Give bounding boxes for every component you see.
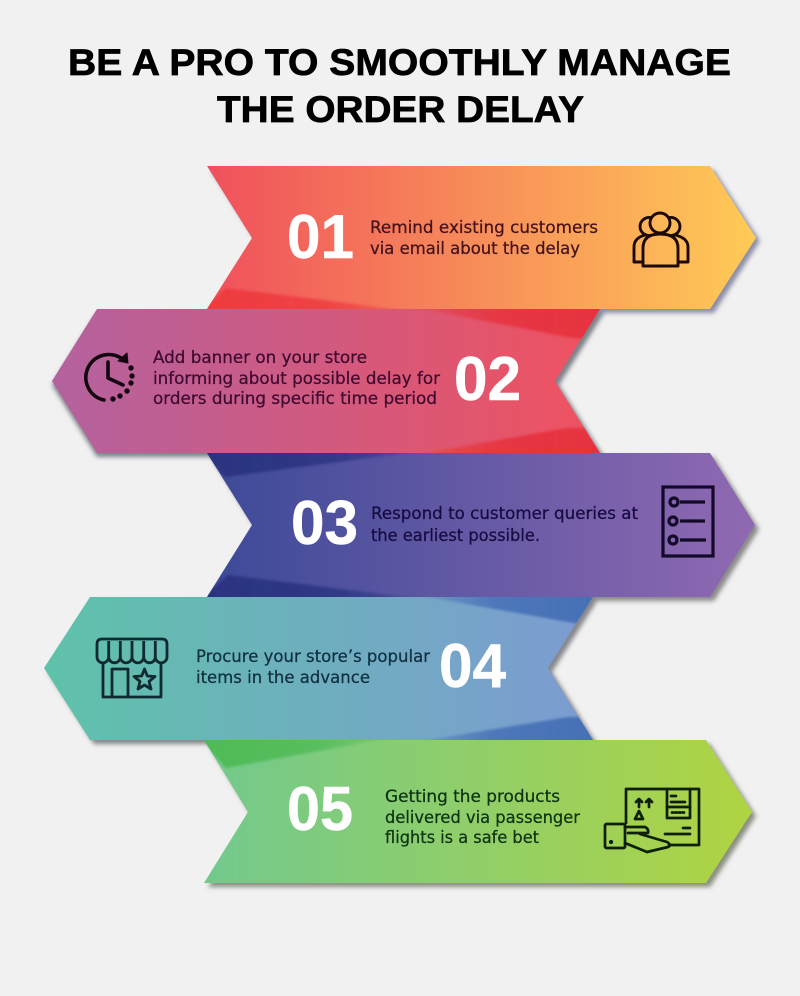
step 05 text: flights is a safe bet bbox=[385, 828, 540, 847]
panel: step 03 bbox=[200, 450, 755, 600]
panel: step 01 bbox=[200, 166, 756, 312]
step 02 number: 02 bbox=[454, 345, 521, 414]
icon: customers bbox=[634, 213, 688, 266]
step 01 text: Remind existing customers bbox=[370, 218, 598, 237]
step 04 number: 04 bbox=[439, 632, 506, 701]
step 03 number: 03 bbox=[291, 489, 358, 558]
icon: clock bbox=[86, 353, 135, 402]
panel: step 04 bbox=[44, 594, 598, 743]
icon: checklist bbox=[663, 487, 713, 556]
step 02 text: orders during specific time period bbox=[153, 389, 437, 408]
panel: step 05 bbox=[198, 737, 752, 883]
title bbox=[68, 42, 731, 130]
title: BE A PRO TO SMOOTHLY MANAGE bbox=[68, 42, 731, 83]
step 02 text: Add banner on your store bbox=[153, 348, 367, 367]
title: THE ORDER DELAY bbox=[217, 89, 584, 130]
step 01 number: 01 bbox=[287, 203, 354, 272]
step 04 text: items in the advance bbox=[196, 668, 370, 687]
icon: store bbox=[97, 639, 167, 697]
step 03 text: the earliest possible. bbox=[371, 526, 540, 545]
step 05 text: delivered via passenger bbox=[385, 808, 580, 827]
step 01 text: via email about the delay bbox=[370, 239, 580, 258]
step 02 text: informing about possible delay for bbox=[153, 369, 440, 388]
step 03 text: Respond to customer queries at bbox=[371, 504, 639, 523]
arrow drop shadows bbox=[48, 170, 760, 887]
panel: step 02 bbox=[52, 306, 605, 456]
icon: parcel delivery bbox=[605, 789, 699, 852]
step 04 text: Procure your store’s popular bbox=[196, 647, 430, 666]
step 05 number: 05 bbox=[287, 775, 353, 844]
step 05 text: Getting the products bbox=[385, 787, 560, 806]
